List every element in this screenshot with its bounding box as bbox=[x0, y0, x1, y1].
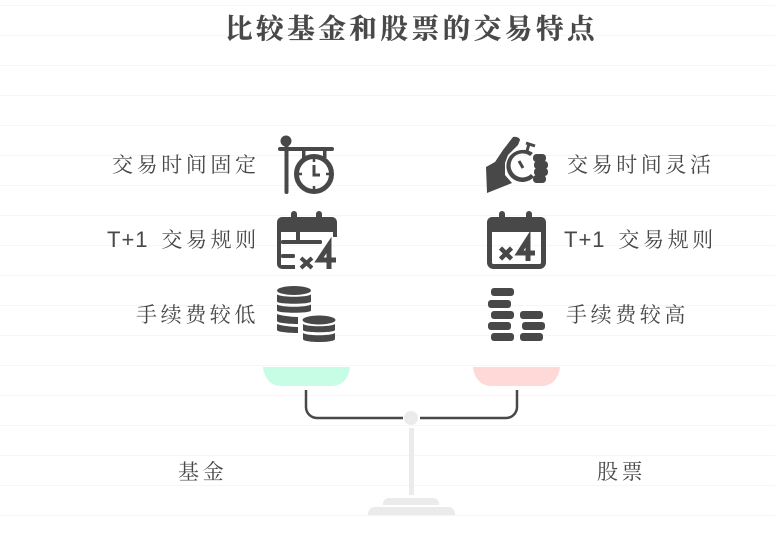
label: stock T+1 rule: T+1 交易规则 bbox=[564, 227, 717, 252]
icon: coin stacks bbox=[277, 286, 336, 342]
icon: calendar x4 left bbox=[277, 211, 337, 269]
title: 比较基金和股票的交易特点 bbox=[225, 13, 598, 44]
label: fund fixed trading hours: 交易时间固定 bbox=[112, 153, 260, 177]
label: fund low fee: 手续费较低 bbox=[136, 303, 259, 327]
icon: calendar x4 right bbox=[487, 211, 546, 266]
scale: post bbox=[409, 428, 414, 495]
label: stock: 股票 bbox=[597, 460, 646, 484]
label: fund T+1 rule: T+1 交易规则 bbox=[107, 227, 260, 252]
label: stock flexible trading hours: 交易时间灵活 bbox=[567, 153, 715, 177]
icon: hanging clock sign bbox=[278, 136, 334, 194]
icon: hand holding stopwatch bbox=[486, 137, 548, 193]
scale: right pan bbox=[473, 367, 560, 386]
label: stock high fee: 手续费较高 bbox=[566, 303, 689, 327]
scale: beam bbox=[306, 390, 517, 418]
scale: base bbox=[368, 498, 455, 515]
scale: pivot bbox=[404, 411, 418, 425]
icon: bar stacks bbox=[488, 288, 545, 341]
scale: left pan bbox=[263, 367, 350, 386]
label: fund: 基金 bbox=[178, 460, 227, 484]
